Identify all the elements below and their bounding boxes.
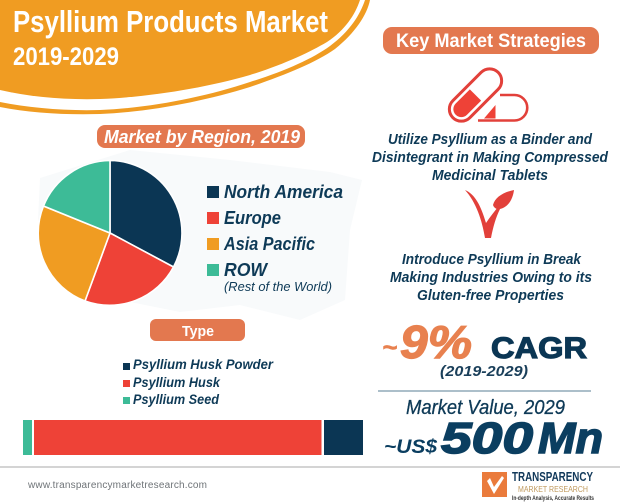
icon: logo mark <box>482 472 507 497</box>
logo <box>482 470 594 502</box>
legend: North America <box>224 181 343 202</box>
type legend: Psyllium Seed <box>133 392 220 407</box>
type legend <box>123 357 274 407</box>
currency prefix: ~US$ <box>384 437 437 458</box>
background world map <box>38 150 362 320</box>
title: Psyllium Products Market <box>13 4 328 39</box>
heading: market by region: Market by Region, 2019 <box>104 127 300 147</box>
type legend: Psyllium Husk <box>133 375 221 390</box>
panel: market value <box>384 397 603 463</box>
panel: key market strategies <box>372 27 609 304</box>
text: strategy one: Utilize Psyllium as a Binder and <box>388 132 593 148</box>
pie chart <box>38 160 182 305</box>
type legend: Psyllium Husk Powder <box>133 357 274 372</box>
market value label: Market Value, 2029 <box>406 397 565 419</box>
text: strategy two <box>390 252 592 304</box>
legend: (Rest of the World) <box>224 280 332 294</box>
text: strategy one <box>372 132 609 184</box>
subtitle years: 2019-2029 <box>13 43 119 71</box>
text: strategy two: Gluten-free Properties <box>417 288 564 304</box>
footer URL: www.transparencymarketresearch.com <box>27 480 207 491</box>
logo: TRANSPARENCY <box>512 470 594 484</box>
CAGR period: (2019-2029) <box>440 363 528 380</box>
CAGR label: CAGR <box>491 332 587 365</box>
icon: capsule pills <box>444 64 527 126</box>
text: strategy one: Medicinal Tablets <box>432 168 548 184</box>
text: strategy two: Making Industries Owing to its <box>390 270 592 286</box>
logo: MARKET RESEARCH <box>518 484 588 494</box>
heading: type <box>150 319 245 341</box>
legend <box>207 181 343 294</box>
heading: type: Type <box>182 323 214 340</box>
CAGR value: ~ <box>382 332 397 362</box>
market value number: 500 <box>441 414 534 463</box>
logo: In-depth Analysis, Accurate Results <box>512 495 594 502</box>
text: strategy one: Disintegrant in Making Compressed <box>372 150 609 166</box>
stacked bar <box>23 420 363 455</box>
market value unit: Mn <box>538 414 603 463</box>
panel: CAGR <box>382 316 587 380</box>
panel: type <box>23 319 363 455</box>
legend: Europe <box>224 207 281 228</box>
legend: Asia Pacific <box>223 233 316 254</box>
legend: ROW <box>224 259 268 280</box>
text: strategy two: Introduce Psyllium in Break <box>402 252 582 268</box>
heading: key market strategies: Key Market Strategies <box>396 31 586 52</box>
icon: vegan leaf <box>465 190 514 238</box>
header banner <box>0 0 370 114</box>
panel: market by region <box>38 125 343 305</box>
CAGR value: 9% <box>400 316 472 368</box>
